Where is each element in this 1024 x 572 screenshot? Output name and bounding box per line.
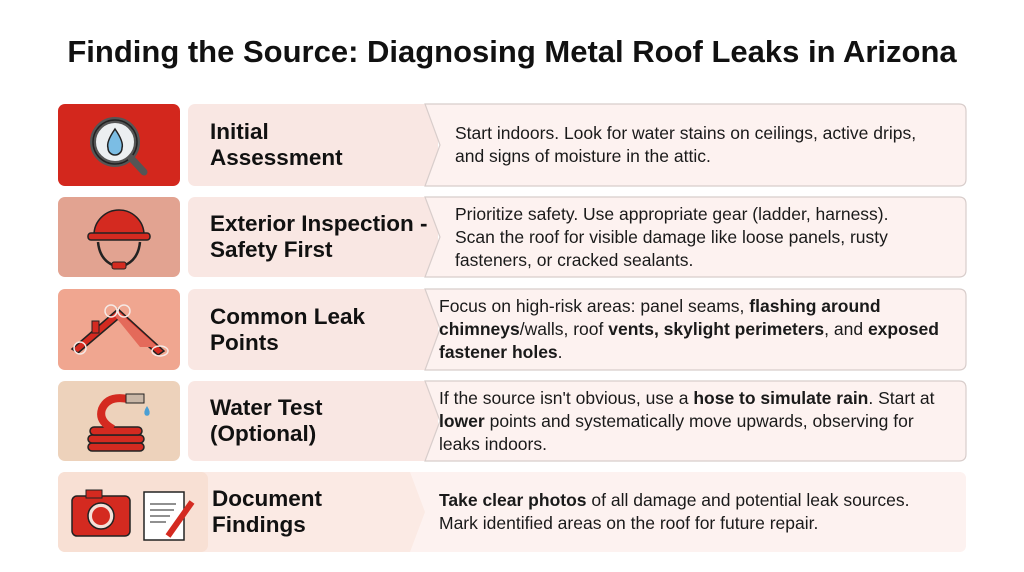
heading: initial assessment: Initial [210,119,269,144]
icon: camera and notepad [71,490,194,541]
icon: hard hat [58,197,180,277]
heading: initial assessment [210,119,343,170]
heading: document findings [212,486,322,537]
text: exterior inspection: Prioritize safety. Use appropriate gear (ladder, harness). Scan the roof for visible damage like loose panels, rusty fasteners, or cracked sealants. [455,204,888,270]
text: document findings: Take clear photos of all damage and potential leak sources. Mark identified areas on the roof for future repair. [439,490,910,533]
heading: common leak points: Points [210,330,279,354]
text: common leak points: Focus on high-risk areas: panel seams, flashing around chimneys/walls, roof vents, skylight perimeters, and exposed fastener holes. [439,296,939,362]
icon: hose [58,381,180,461]
heading: water test [210,395,323,446]
icon: roof leak points [58,289,180,370]
heading: water test: Water Test [210,395,323,420]
text: water test: If the source isn't obvious, use a hose to simulate rain. Start at lower points and systematically move upwards, observing for leaks indoors. [439,388,935,454]
heading: document findings: Findings [212,512,306,537]
text: initial assessment: Start indoors. Look for water stains on ceilings, active drips, and signs of moisture in the attic. [455,123,916,166]
heading: initial assessment: Assessment [210,145,343,170]
heading: exterior inspection: Safety First [210,237,333,262]
heading: common leak points: Common Leak [210,304,365,328]
title: Finding the Source: Diagnosing Metal Roof Leaks in Arizona [67,34,957,69]
heading: exterior inspection [210,211,428,262]
heading: water test: (Optional) [210,421,316,446]
heading: document findings: Document [212,486,322,511]
heading: common leak points [210,304,365,354]
heading: exterior inspection: Exterior Inspection - [210,211,428,236]
icon: magnifier with water drop [58,104,180,186]
